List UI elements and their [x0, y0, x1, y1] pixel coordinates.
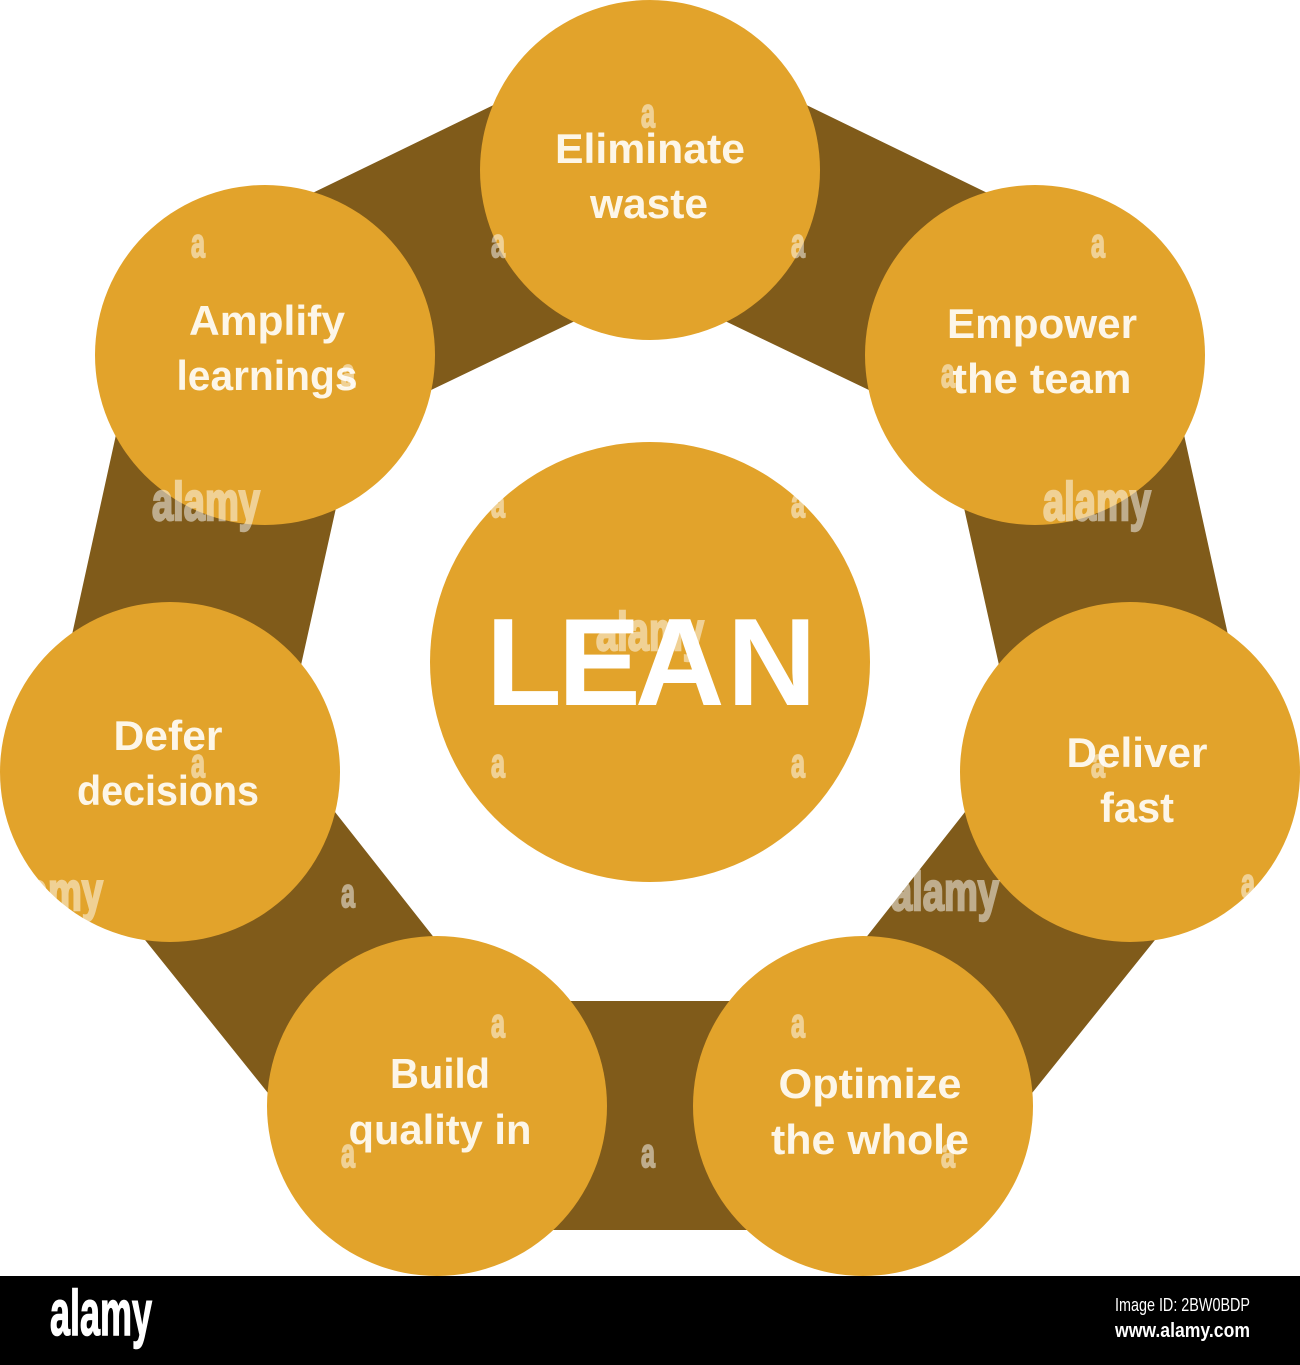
- watermark marks over the diagram: a: [491, 1000, 506, 1046]
- principle: Build quality in: [267, 936, 607, 1276]
- watermark marks over the diagram: alamy: [1043, 472, 1151, 532]
- principle: Deliver fast: Deliver: [1066, 729, 1208, 776]
- watermark marks over the diagram: a: [341, 1130, 356, 1176]
- principle: Defer decisions: decisions: [77, 767, 259, 814]
- principle: Optimize the whole: [693, 936, 1033, 1276]
- principle: Optimize the whole: Optimize: [778, 1060, 962, 1107]
- watermark marks over the diagram: alamy: [152, 472, 260, 532]
- watermark marks over the diagram: a: [941, 350, 956, 396]
- footer bar: www.alamy.com: [1114, 1320, 1250, 1342]
- watermark marks over the diagram: a: [1091, 740, 1106, 786]
- principle: Empower the team: [865, 185, 1205, 525]
- watermark marks over the diagram: a: [191, 740, 206, 786]
- principle: Eliminate waste: Eliminate: [555, 125, 745, 172]
- watermark marks over the diagram: a: [341, 350, 356, 396]
- principle: Amplify learnings: learnings: [176, 352, 358, 399]
- principle: Build quality in: quality in: [348, 1106, 532, 1153]
- principle: Build quality in: Build: [390, 1050, 490, 1097]
- watermark marks over the diagram: a: [341, 870, 356, 916]
- principle: Empower the team: Empower: [947, 300, 1137, 347]
- principle: Amplify learnings: Amplify: [189, 297, 346, 344]
- principle: Eliminate waste: [480, 0, 820, 340]
- principle: Amplify learnings: [95, 185, 435, 525]
- watermark marks over the diagram: a: [491, 480, 506, 526]
- watermark marks over the diagram: a: [941, 1130, 956, 1176]
- watermark marks over the diagram: alamy: [596, 602, 704, 662]
- watermark marks over the diagram: a: [791, 1000, 806, 1046]
- footer bar: [0, 1276, 1300, 1365]
- watermark marks over the diagram: a: [1091, 220, 1106, 266]
- principle: Deliver fast: fast: [1100, 784, 1174, 831]
- watermark marks over the diagram: a: [791, 740, 806, 786]
- watermark marks over the diagram: [0, 90, 1256, 1176]
- footer bar: alamy: [50, 1277, 152, 1349]
- watermark marks over the diagram: a: [791, 220, 806, 266]
- principle: Empower the team: the team: [952, 355, 1132, 402]
- watermark marks over the diagram: a: [491, 220, 506, 266]
- watermark marks over the diagram: a: [1241, 860, 1256, 906]
- center circle: LEAN: LEAN: [486, 594, 817, 732]
- watermark marks over the diagram: a: [641, 90, 656, 136]
- watermark marks over the diagram: a: [641, 1130, 656, 1176]
- principle: Deliver fast: [960, 602, 1300, 942]
- center circle: LEAN: [430, 442, 870, 882]
- principle: Defer decisions: [0, 602, 340, 942]
- principle: Optimize the whole: the whole: [771, 1116, 969, 1163]
- watermark marks over the diagram: a: [791, 480, 806, 526]
- principle: Eliminate waste: waste: [589, 180, 708, 227]
- footer bar: Image ID: 2BW0BDP: [1115, 1295, 1250, 1315]
- watermark marks over the diagram: a: [491, 740, 506, 786]
- watermark marks over the diagram: a: [191, 220, 206, 266]
- watermark marks over the diagram: alamy: [891, 862, 999, 922]
- principle: Defer decisions: Defer: [114, 712, 222, 759]
